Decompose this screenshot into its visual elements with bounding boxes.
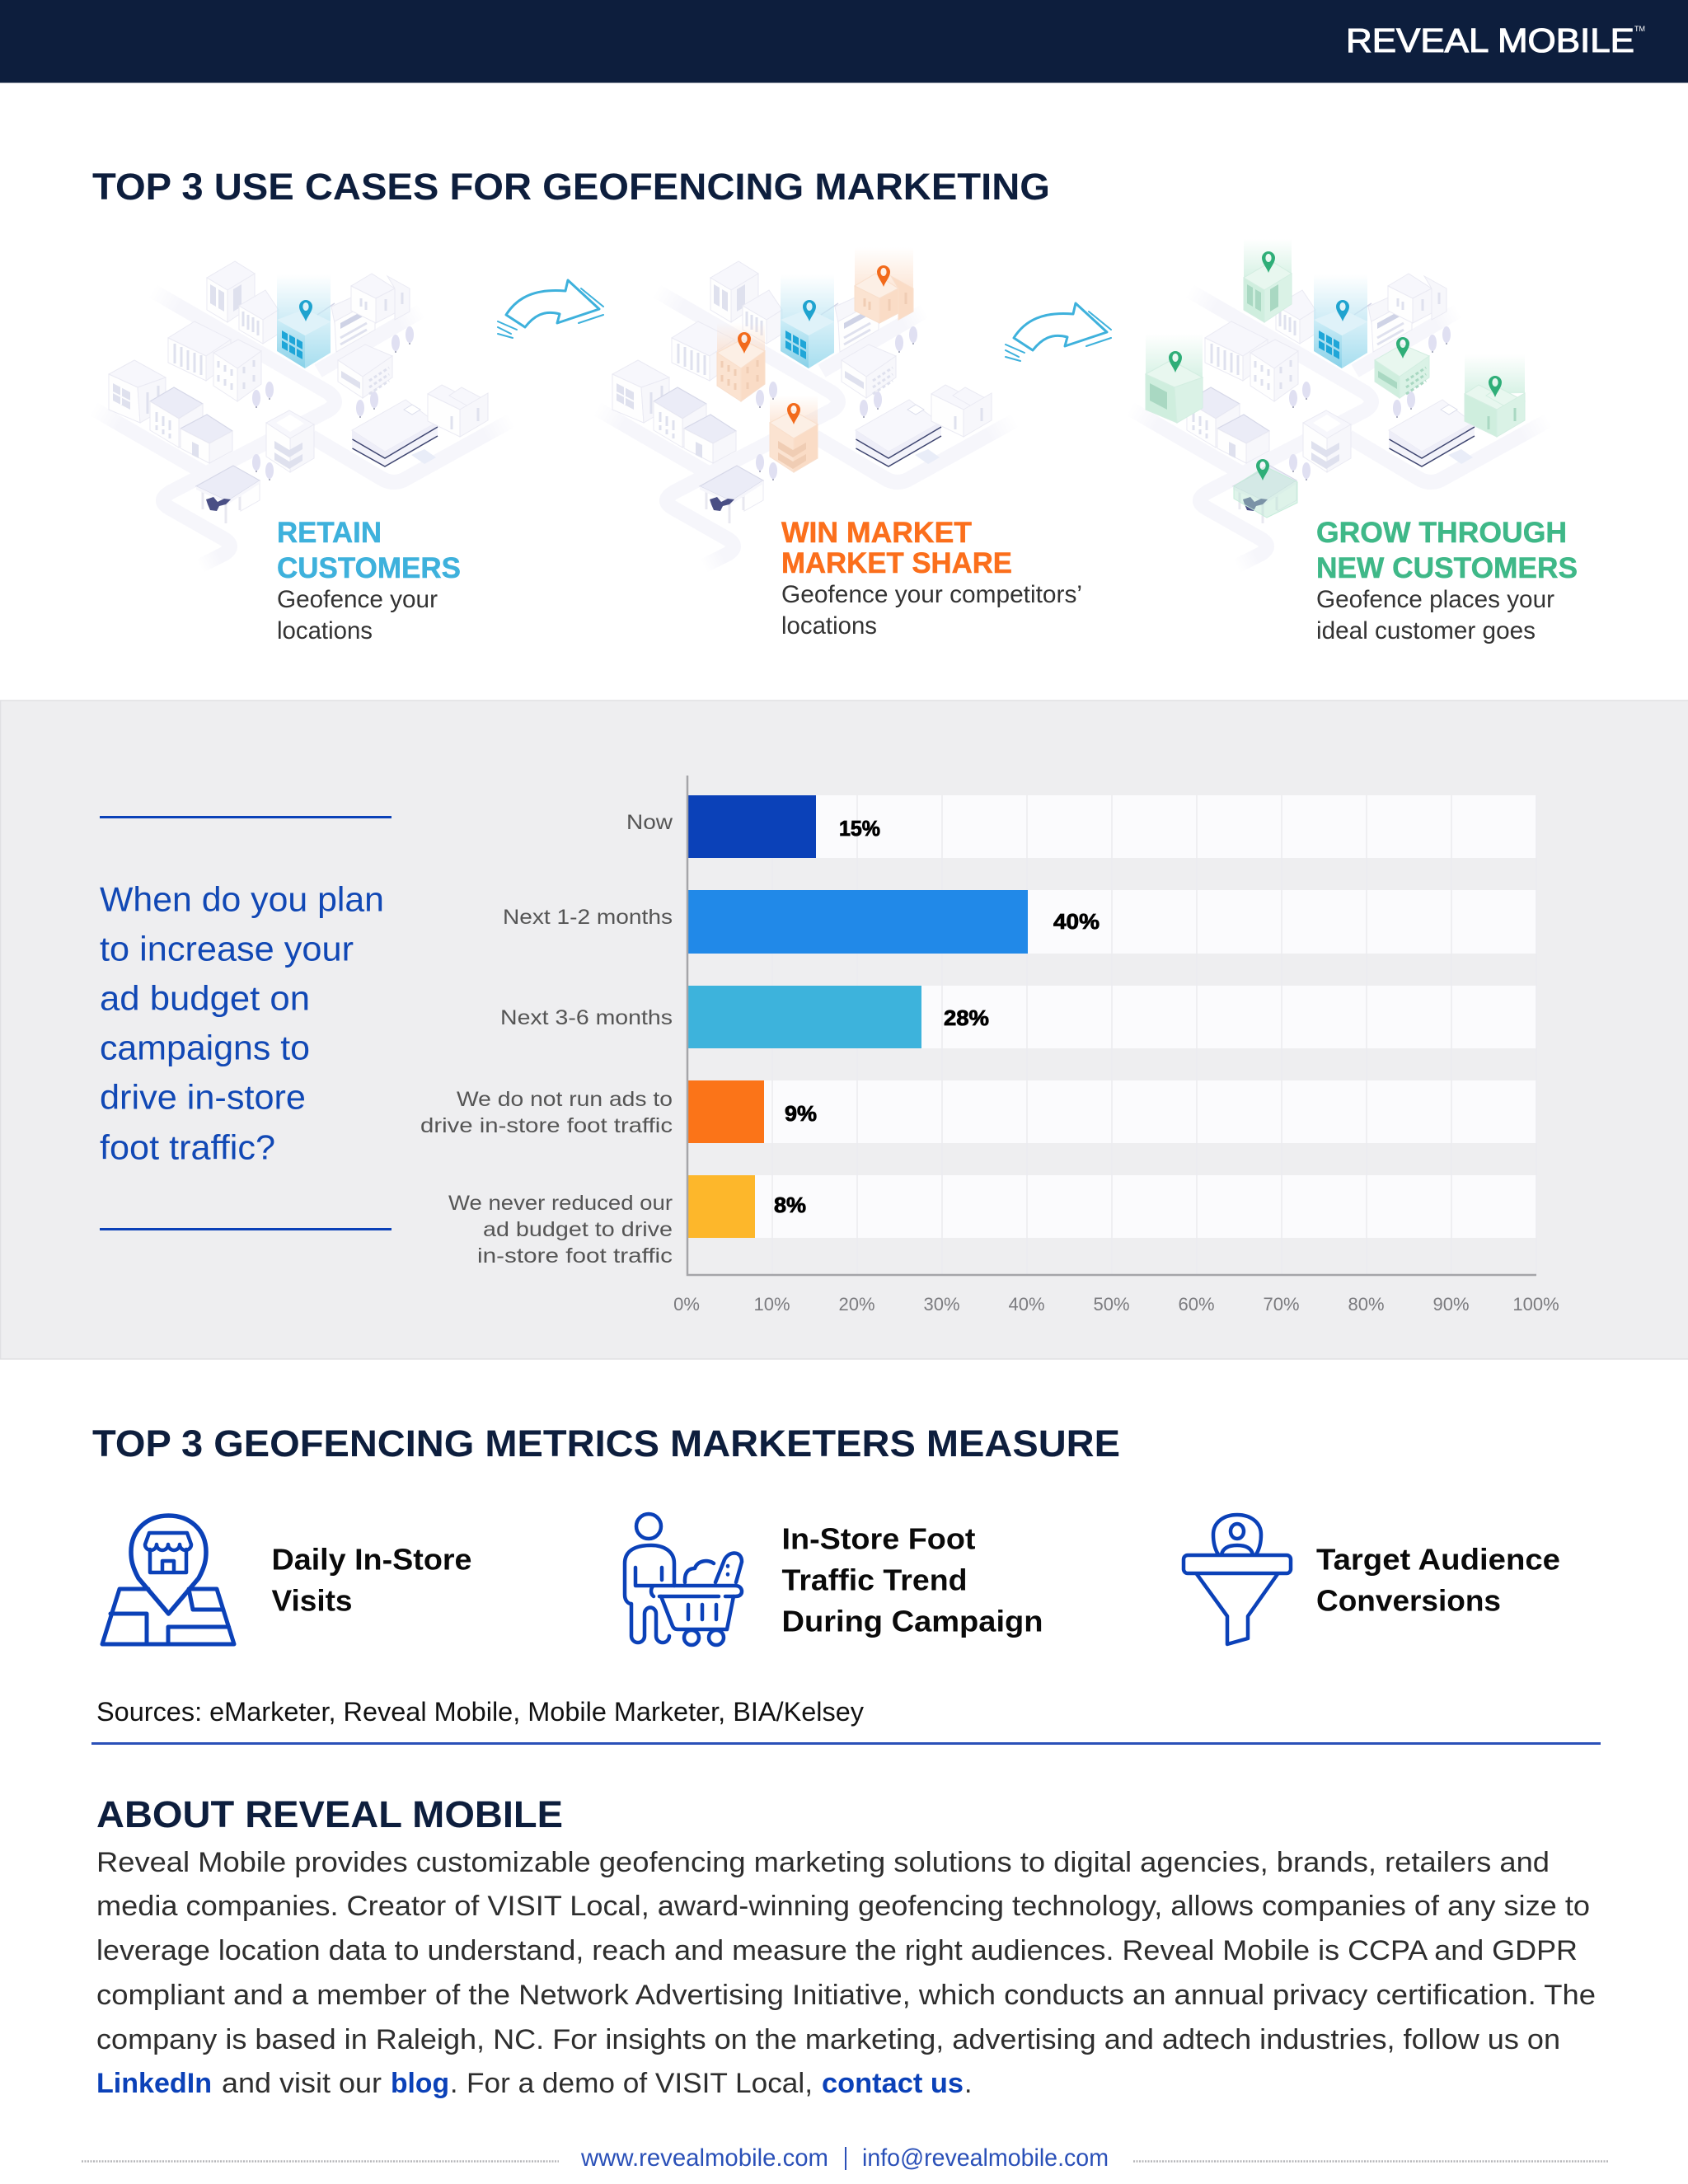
label: target audience conversions: Conversions bbox=[1316, 1584, 1501, 1617]
heading: retain customers: RETAIN bbox=[277, 517, 382, 549]
heading: grow through new customers bbox=[1316, 517, 1578, 584]
callout: survey question: campaigns to bbox=[100, 1029, 310, 1066]
x-axis tick labels: 80% bbox=[1348, 1294, 1385, 1315]
arrow: win to grow bbox=[1006, 303, 1111, 361]
icon: person with shopping cart bbox=[625, 1514, 742, 1645]
value labels: 40% bbox=[1053, 909, 1100, 934]
sources: Sources: eMarketer, Reveal Mobile, Mobile Marketer, BIA/Kelsey bbox=[96, 1697, 864, 1727]
text block: about paragraph: and visit our bbox=[222, 2068, 382, 2099]
heading: grow through new customers: NEW CUSTOMERS bbox=[1316, 552, 1578, 584]
value labels: 9% bbox=[785, 1101, 817, 1126]
category labels: Next 3-6 months bbox=[500, 1006, 673, 1029]
description: win market share: locations bbox=[781, 612, 877, 640]
heading: grow through new customers: GROW THROUGH bbox=[1316, 517, 1567, 549]
value labels: 28% bbox=[944, 1005, 989, 1030]
metric: target audience conversions bbox=[1184, 1515, 1560, 1644]
bar: now 15% bbox=[688, 795, 816, 858]
value labels: 15% bbox=[839, 816, 880, 841]
x-axis tick labels: 50% bbox=[1093, 1294, 1130, 1315]
panel: win market share bbox=[584, 247, 1082, 640]
label: target audience conversions: Target Audience bbox=[1316, 1543, 1560, 1576]
heading: retain customers bbox=[277, 517, 461, 584]
x-axis tick labels: 10% bbox=[753, 1294, 790, 1315]
callout: survey question: ad budget on bbox=[100, 979, 310, 1017]
text block: about paragraph: . bbox=[450, 2068, 457, 2099]
illustration: city with own location pinned bbox=[81, 261, 524, 578]
panel: retain customers bbox=[81, 261, 524, 644]
label: daily in-store visits bbox=[272, 1543, 471, 1617]
category labels: drive in-store foot traffic bbox=[420, 1114, 673, 1137]
category labels: Now bbox=[626, 811, 673, 834]
callout: survey question: When do you plan bbox=[100, 880, 384, 918]
header bar bbox=[0, 0, 1688, 82]
logo: Reveal Mobile: TM bbox=[1634, 25, 1645, 33]
label: in-store foot traffic trend during campaign: Traffic Trend bbox=[781, 1563, 968, 1597]
callout: survey question bbox=[100, 816, 392, 1230]
description: grow through new customers bbox=[1316, 586, 1554, 644]
description: win market share bbox=[781, 581, 1082, 640]
label: target audience conversions bbox=[1316, 1543, 1560, 1617]
bar: do not run ads 9% bbox=[688, 1080, 764, 1143]
metric: daily in-store visits bbox=[102, 1516, 471, 1644]
x-axis tick labels: 20% bbox=[838, 1294, 875, 1315]
title: top 3 use cases: TOP 3 USE CASES FOR GEOFENCING MARKETING bbox=[92, 166, 1050, 208]
bar: next 1-2 months 40% bbox=[688, 890, 1028, 954]
text block: about paragraph: LinkedIn bbox=[96, 2068, 212, 2099]
panel: survey background bbox=[0, 701, 1688, 1359]
text block: about paragraph: For a demo of VISIT Local, bbox=[467, 2068, 813, 2099]
bar: next 3-6 months 28% bbox=[688, 986, 921, 1048]
x-axis tick labels: 70% bbox=[1263, 1294, 1300, 1315]
heading: about reveal mobile: ABOUT REVEAL MOBILE bbox=[96, 1793, 563, 1835]
bar chart: ad budget timing bbox=[420, 776, 1559, 1315]
footer: contact line bbox=[82, 2144, 1609, 2172]
text block: about paragraph: media companies. Creator of VISIT Local, award-winning geofencing technology, allows companies of any size to bbox=[96, 1891, 1590, 1922]
icon: map pin with store bbox=[102, 1516, 234, 1644]
title: top 3 metrics: TOP 3 GEOFENCING METRICS MARKETERS MEASURE bbox=[92, 1422, 1120, 1465]
x-axis tick labels: 100% bbox=[1512, 1294, 1559, 1315]
heading: win market share: WIN MARKET bbox=[781, 517, 972, 549]
label: daily in-store visits: Daily In-Store bbox=[272, 1543, 471, 1576]
text block: about paragraph: contact us bbox=[822, 2068, 964, 2099]
label: in-store foot traffic trend during campaign bbox=[781, 1521, 1043, 1638]
description: win market share: Geofence your competitors’ bbox=[781, 581, 1082, 608]
label: in-store foot traffic trend during campaign: During Campaign bbox=[781, 1604, 1043, 1638]
description: retain customers: Geofence your bbox=[277, 586, 438, 613]
text block: about paragraph: blog bbox=[391, 2068, 449, 2099]
value labels: 8% bbox=[774, 1193, 806, 1217]
text block: about paragraph: Reveal Mobile provides customizable geofencing marketing solutions to digital agencies, brands, retailers and bbox=[96, 1847, 1550, 1878]
icon: person in funnel bbox=[1184, 1515, 1291, 1644]
x-axis tick labels: 90% bbox=[1432, 1294, 1470, 1315]
panel: grow through new customers bbox=[1118, 239, 1578, 644]
category labels bbox=[420, 811, 673, 1268]
illustration: city with competitor locations pinned bbox=[584, 247, 1028, 578]
value labels bbox=[774, 816, 1100, 1217]
callout: survey question: drive in-store bbox=[100, 1078, 306, 1116]
x-axis tick labels: 30% bbox=[923, 1294, 960, 1315]
description: retain customers: locations bbox=[277, 617, 373, 644]
category labels: Next 1-2 months bbox=[503, 906, 673, 929]
label: in-store foot traffic trend during campaign: In-Store Foot bbox=[781, 1521, 976, 1556]
category labels: We never reduced our bbox=[448, 1192, 673, 1215]
illustration: city with ideal-customer places pinned bbox=[1118, 239, 1561, 578]
callout: survey question: to increase your bbox=[100, 930, 354, 968]
text block: about paragraph bbox=[96, 1847, 1596, 2099]
description: retain customers bbox=[277, 586, 438, 644]
label: daily in-store visits: Visits bbox=[272, 1584, 353, 1617]
x-axis tick labels: 40% bbox=[1008, 1294, 1045, 1315]
x-axis tick labels bbox=[673, 1294, 1559, 1315]
category labels: in-store foot traffic bbox=[477, 1244, 673, 1268]
heading: retain customers: CUSTOMERS bbox=[277, 552, 461, 584]
logo: Reveal Mobile: REVEAL MOBILE bbox=[1346, 21, 1634, 59]
x-axis tick labels: 60% bbox=[1178, 1294, 1215, 1315]
x-axis tick labels: 0% bbox=[673, 1294, 700, 1315]
text block: about paragraph: leverage location data to understand, reach and measure the right audiences. Reveal Mobile is CCPA and GDPR bbox=[96, 1935, 1578, 1966]
callout: survey question: foot traffic? bbox=[100, 1127, 275, 1167]
heading: win market share bbox=[781, 517, 1012, 579]
arrow: retain to win bbox=[498, 280, 603, 338]
category labels: We do not run ads to bbox=[457, 1088, 673, 1111]
text block: about paragraph: . bbox=[964, 2068, 972, 2099]
footer: contact line: info@revealmobile.com bbox=[862, 2144, 1109, 2172]
description: grow through new customers: ideal customer goes bbox=[1316, 617, 1536, 644]
bar: never reduced 8% bbox=[688, 1175, 755, 1238]
description: grow through new customers: Geofence places your bbox=[1316, 586, 1554, 613]
footer: contact line: www.revealmobile.com bbox=[580, 2144, 828, 2172]
heading: win market share: MARKET SHARE bbox=[781, 547, 1012, 579]
category labels: ad budget to drive bbox=[483, 1218, 673, 1241]
metric: in-store foot traffic trend bbox=[625, 1514, 1043, 1645]
text block: about paragraph: compliant and a member of the Network Advertising Initiative, which conducts an annual privacy certification. The bbox=[96, 1980, 1596, 2011]
text block: about paragraph: company is based in Raleigh, NC. For insights on the marketing, advertising and adtech industries, follow us on bbox=[96, 2024, 1560, 2055]
